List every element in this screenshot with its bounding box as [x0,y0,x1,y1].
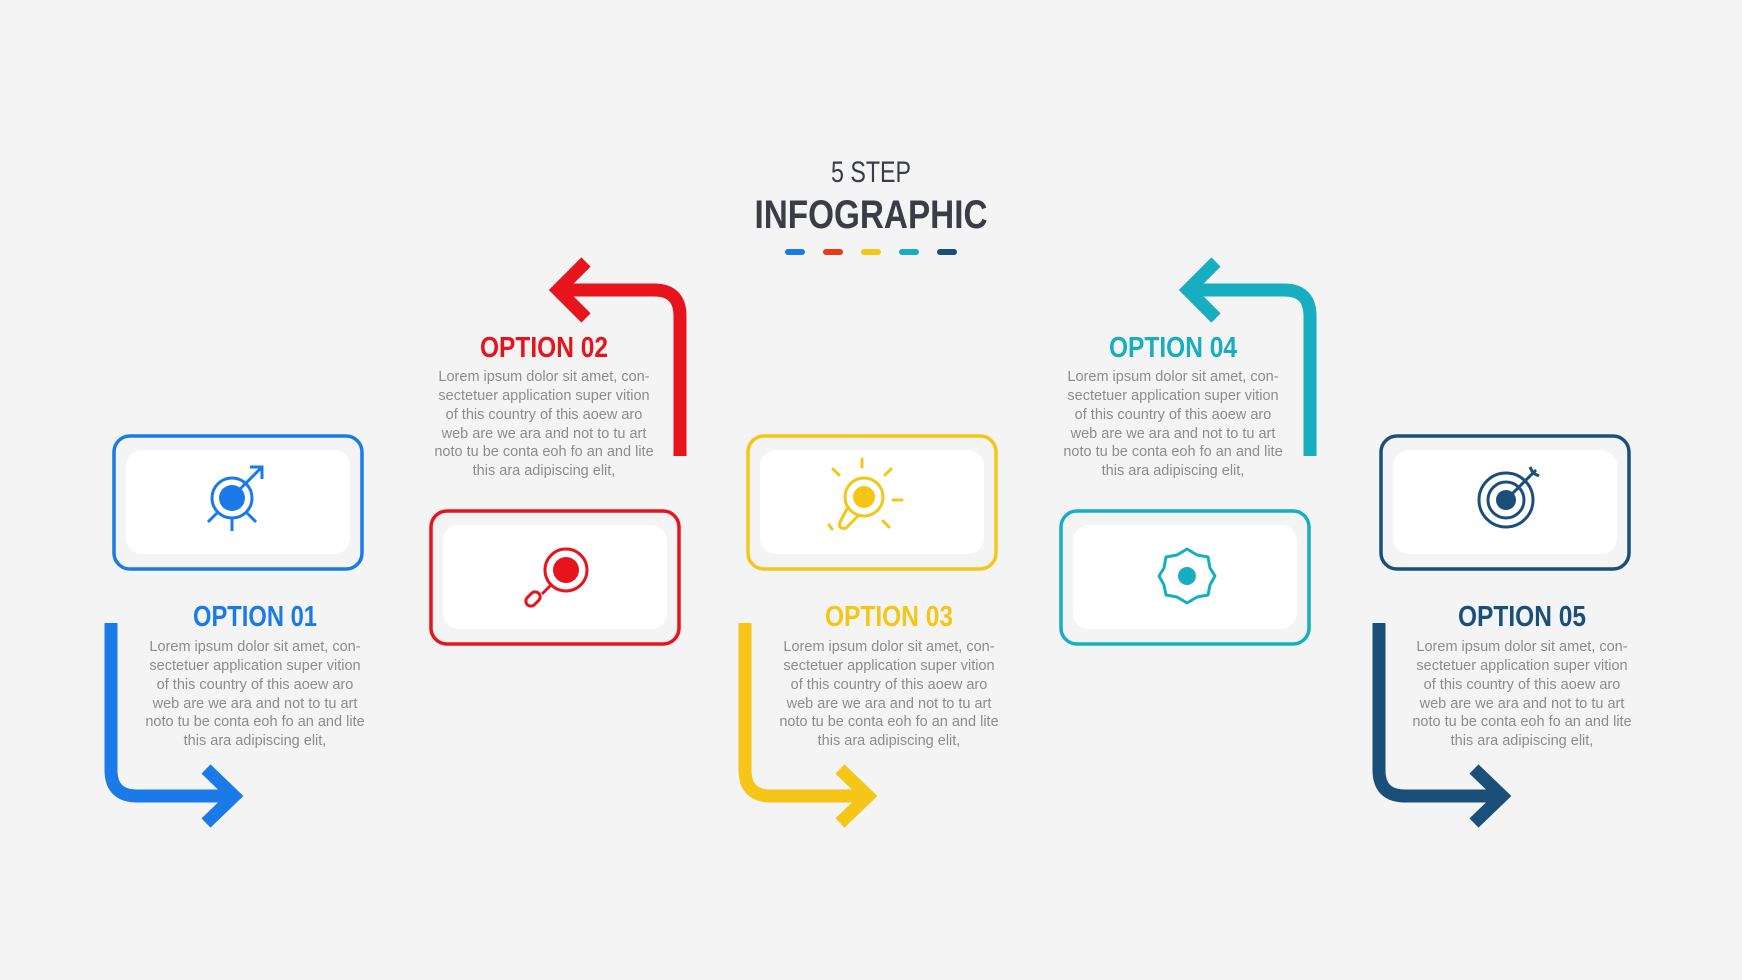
heading option 04: OPTION 04 [1109,332,1237,364]
text block 5: this ara adipiscing elit, [1451,733,1593,749]
icon: target with arrow [208,467,262,531]
text block 3: sectetuer application super vition [783,658,995,674]
arrow 1 [111,623,236,823]
title: infographic: INFOGRAPHIC [754,193,988,237]
arrow 3 [745,623,870,823]
panel: option 04 [1061,262,1310,644]
panel: option 02 [431,262,680,644]
icon: bullseye [1479,467,1539,527]
heading option 01: OPTION 01 [193,601,317,633]
text block 2: web are we ara and not to tu art [441,426,646,442]
text block 5: Lorem ipsum dolor sit amet, con- [1416,639,1628,655]
icon: gear [1159,549,1215,603]
box 3 [748,436,996,569]
box 1 [114,436,362,569]
text block 2: sectetuer application super vition [438,388,650,404]
text block 3: of this country of this aoew aro [791,677,987,693]
text block 4: noto tu be conta eoh fo an and lite [1063,444,1283,460]
text block 1: of this country of this aoew aro [157,677,353,693]
text block 3: this ara adipiscing elit, [818,733,960,749]
heading option 03: OPTION 03 [825,601,953,633]
arrow 2 [556,262,680,456]
text block 5: noto tu be conta eoh fo an and lite [1412,714,1632,730]
title: 5 step: 5 STEP [831,156,911,189]
text block 1: sectetuer application super vition [149,658,361,674]
box 4 [1061,511,1309,644]
text block 2: noto tu be conta eoh fo an and lite [434,444,654,460]
panel: option 03 [745,436,999,823]
text block 3: Lorem ipsum dolor sit amet, con- [783,639,995,655]
text block 4: this ara adipiscing elit, [1102,463,1244,479]
text block 1: web are we ara and not to tu art [152,696,357,712]
text block 4: sectetuer application super vition [1067,388,1279,404]
icon: magnifier [524,549,587,608]
text block 2: of this country of this aoew aro [446,407,642,423]
arrow 4 [1186,262,1310,456]
panel: option 01 [111,436,365,823]
box 2 [431,511,679,644]
text block 3: noto tu be conta eoh fo an and lite [779,714,999,730]
text block 5: of this country of this aoew aro [1424,677,1620,693]
icon: light bulb [829,459,902,529]
text block 2: this ara adipiscing elit, [473,463,615,479]
heading option 05: OPTION 05 [1458,601,1586,633]
arrow 5 [1379,623,1504,823]
text block 4: web are we ara and not to tu art [1070,426,1275,442]
text block 1: this ara adipiscing elit, [184,733,326,749]
text block 1: noto tu be conta eoh fo an and lite [145,714,365,730]
text block 3: web are we ara and not to tu art [786,696,991,712]
heading option 02: OPTION 02 [480,332,608,364]
text block 5: web are we ara and not to tu art [1419,696,1624,712]
text block 4: of this country of this aoew aro [1075,407,1271,423]
text block 2: Lorem ipsum dolor sit amet, con- [438,369,650,385]
text block 4: Lorem ipsum dolor sit amet, con- [1067,369,1279,385]
text block 1: Lorem ipsum dolor sit amet, con- [149,639,361,655]
text block 5: sectetuer application super vition [1416,658,1628,674]
box 5 [1381,436,1629,569]
colour dashes [788,249,954,255]
panel: option 05 [1379,436,1632,823]
